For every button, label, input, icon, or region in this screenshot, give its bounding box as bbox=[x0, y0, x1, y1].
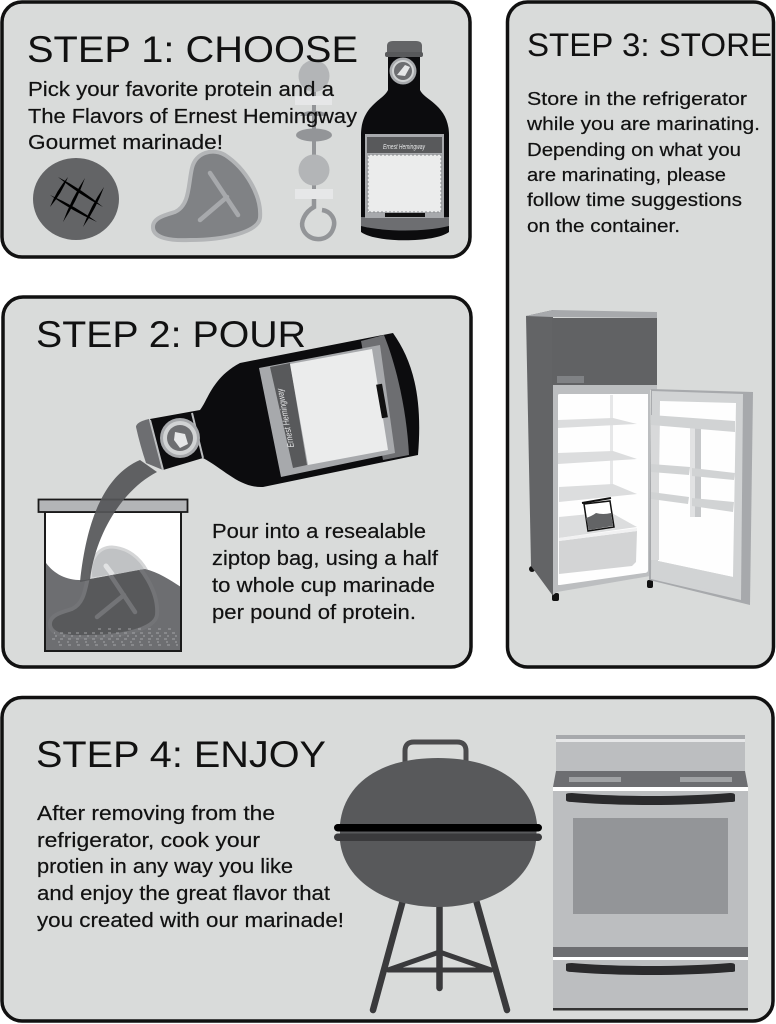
marinade pour stream bbox=[80, 460, 157, 582]
text block: step 3 instructions: Depending on what you bbox=[527, 139, 741, 160]
text block: step 1 instructions bbox=[28, 78, 358, 154]
heading: step 4: STEP 4: ENJOY bbox=[36, 734, 326, 775]
panel: step 3 store bbox=[508, 2, 774, 667]
text block: step 2 instructions: per pound of protein. bbox=[212, 601, 416, 624]
text block: step 3 instructions: Store in the refrigerator bbox=[527, 88, 747, 109]
text block: step 4 instructions bbox=[37, 802, 344, 932]
text block: step 1 instructions: The Flavors of Ernest Hemingway bbox=[28, 105, 358, 128]
icon: small bag on fridge shelf bbox=[582, 498, 614, 531]
icon: kebab skewer bbox=[295, 60, 334, 239]
text block: step 1 instructions: Pick your favorite protein and a bbox=[28, 78, 335, 101]
icon: steak bbox=[153, 152, 260, 240]
heading: step 2: STEP 2: POUR bbox=[36, 314, 306, 355]
text block: step 3 instructions: while you are marinating. bbox=[526, 113, 760, 134]
text block: step 3 instructions bbox=[526, 88, 760, 236]
panel background bbox=[2, 698, 773, 1021]
icon: marinade bottle bbox=[361, 41, 449, 240]
icon: open refrigerator bbox=[526, 310, 753, 605]
text block: step 2 instructions: to whole cup marinade bbox=[212, 574, 435, 597]
text block: step 4 instructions: and enjoy the great flavor that bbox=[37, 882, 330, 905]
text block: step 2 instructions: Pour into a resealable bbox=[212, 520, 426, 543]
text block: step 3 instructions: follow time suggestions bbox=[527, 189, 742, 210]
text block: step 2 instructions: ziptop bag, using a half bbox=[212, 547, 438, 570]
text block: step 4 instructions: After removing from the bbox=[37, 802, 275, 825]
icon: kettle grill bbox=[334, 742, 542, 1010]
bottle label wordmark: Ernest Hemingway bbox=[383, 144, 425, 151]
bottle label wordmark: Ernest Hemingway bbox=[275, 387, 296, 449]
panel background bbox=[2, 2, 470, 257]
text block: step 3 instructions: on the container. bbox=[527, 215, 680, 236]
text block: step 4 instructions: you created with our marinade! bbox=[37, 909, 344, 932]
text block: step 2 instructions bbox=[212, 520, 438, 624]
text block: step 1 instructions: Gourmet marinade! bbox=[28, 131, 223, 154]
icon: tilted marinade bottle bbox=[136, 333, 419, 487]
heading: step 1: STEP 1: CHOOSE bbox=[27, 29, 358, 70]
heading: step 3: STEP 3: STORE bbox=[527, 27, 772, 63]
text block: step 3 instructions: are marinating, please bbox=[527, 164, 726, 185]
panel: step 2 pour bbox=[3, 297, 471, 667]
icon: chicken breast with grill marks bbox=[33, 158, 119, 240]
panel: step 1 choose bbox=[2, 2, 470, 257]
panel background bbox=[508, 2, 774, 667]
text block: step 4 instructions: protien in any way you like bbox=[37, 855, 293, 878]
icon: ziptop bag with steak and marinade bbox=[38, 500, 188, 651]
panel background bbox=[3, 297, 471, 667]
text block: step 4 instructions: refrigerator, cook your bbox=[37, 829, 260, 852]
icon: oven range bbox=[553, 735, 748, 1010]
panel: step 4 enjoy bbox=[2, 698, 773, 1021]
